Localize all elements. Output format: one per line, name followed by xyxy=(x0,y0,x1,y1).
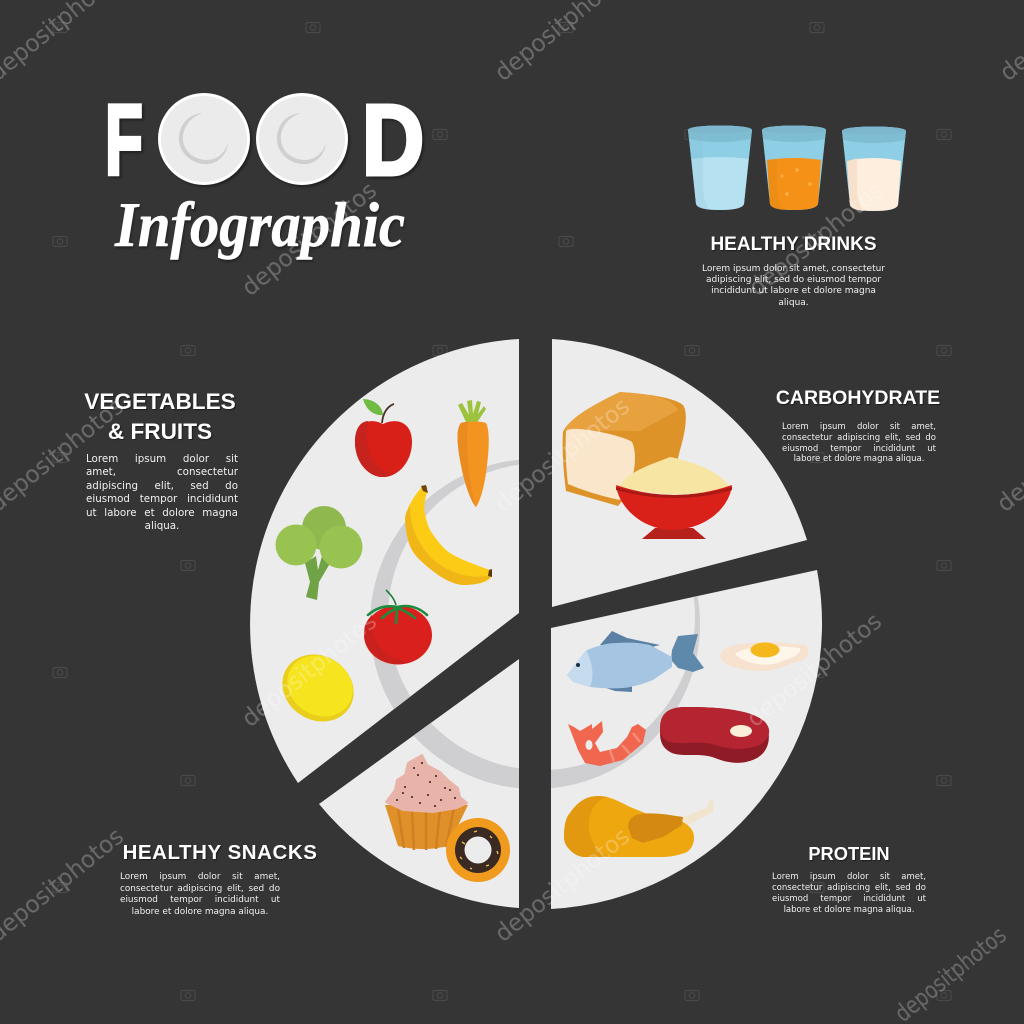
heading: healthy drinks: HEALTHY DRINKS xyxy=(710,234,877,255)
segment: protein xyxy=(551,570,822,909)
watermark text: depositphotos xyxy=(741,607,887,733)
icon: glass of water xyxy=(688,126,752,210)
text: healthy drinks body: incididunt ut labore et dolore magna xyxy=(711,286,876,296)
icon: tomato xyxy=(364,590,432,664)
icon: roast chicken xyxy=(564,796,713,857)
icon: steak xyxy=(660,707,769,763)
heading: healthy snacks: HEALTHY SNACKS xyxy=(123,841,317,864)
text: vegetables and fruits body: amet, consectetur xyxy=(86,466,238,478)
text: healthy snacks body xyxy=(120,872,280,916)
text: vegetables and fruits body: aliqua. xyxy=(145,520,179,532)
icon: glass of milk xyxy=(842,126,906,211)
segment: healthy snacks xyxy=(319,659,519,908)
subtitle script: Infographic xyxy=(114,189,405,260)
watermark text: depositphotos xyxy=(489,392,635,518)
segment: vegetables and fruits xyxy=(250,339,519,783)
heading: vegetables and fruits: & FRUITS xyxy=(108,418,212,444)
heading: vegetables and fruits xyxy=(84,389,236,444)
title letter F: F xyxy=(105,84,143,196)
panel: healthy drinks glasses xyxy=(688,126,906,211)
heading: protein: PROTEIN xyxy=(808,843,890,864)
text: healthy drinks body xyxy=(702,264,885,308)
icon: glass of orange juice xyxy=(762,126,826,210)
text: healthy snacks body: eiusmod tempor incididunt ut xyxy=(120,895,280,905)
text: healthy drinks body: aliqua. xyxy=(778,298,809,308)
text: carbohydrate body: eiusmod tempor incididunt ut xyxy=(782,444,936,454)
icon: lemon xyxy=(270,641,366,735)
text: carbohydrate body: consectetur adipiscing elit, sed do xyxy=(782,433,936,443)
text: vegetables and fruits body: ut labore et dolore magna xyxy=(86,507,238,519)
heading: carbohydrate: CARBOHYDRATE xyxy=(776,387,940,409)
icon: plate as letter O xyxy=(158,93,250,185)
text: vegetables and fruits body: Lorem ipsum dolor sit xyxy=(86,453,238,465)
text: protein body: labore et dolore magna aliqua. xyxy=(784,905,914,915)
text: protein body: Lorem ipsum dolor sit amet, xyxy=(772,872,926,882)
watermark text: depositphotos xyxy=(743,176,889,302)
text: carbohydrate body xyxy=(782,422,936,464)
icon: banana xyxy=(405,485,492,585)
text: protein body xyxy=(772,872,926,915)
watermark text: depositphotos xyxy=(489,822,635,948)
text: healthy drinks body: adipiscing elit, sed do eiusmod tempor xyxy=(706,275,881,285)
text: protein body: eiusmod tempor incididunt ut xyxy=(772,894,926,904)
text: healthy snacks body: Lorem ipsum dolor sit amet, xyxy=(120,872,280,882)
icon: bowl of rice xyxy=(616,457,732,539)
heading: vegetables and fruits: VEGETABLES xyxy=(84,389,236,414)
icon: cupcake xyxy=(385,755,468,850)
plate inner ring xyxy=(370,459,700,789)
text: vegetables and fruits body: adipiscing elit, sed do xyxy=(86,480,238,492)
text: vegetables and fruits body xyxy=(86,453,238,532)
title letter D: D xyxy=(362,84,424,196)
text: carbohydrate body: Lorem ipsum dolor sit amet, xyxy=(782,422,936,432)
text: vegetables and fruits body: eiusmod tempor incididunt xyxy=(86,493,238,505)
icon: bread loaf xyxy=(563,392,686,506)
icon: broccoli xyxy=(276,506,362,600)
icon: apple xyxy=(355,399,412,477)
watermark text: depositphotos xyxy=(236,176,382,302)
icon: carrot xyxy=(458,400,489,507)
icon: donut xyxy=(446,818,510,882)
text: carbohydrate body: labore et dolore magna aliqua. xyxy=(794,454,924,464)
text: healthy drinks body: Lorem ipsum dolor sit amet, consectetur xyxy=(702,264,885,274)
panel: plate pie chart xyxy=(250,339,822,909)
title xyxy=(105,84,424,196)
segment: carbohydrate xyxy=(552,339,807,607)
text: healthy snacks body: consectetur adipiscing elit, sed do xyxy=(120,884,280,894)
watermark text: depositphotos xyxy=(236,607,382,733)
icon: fish xyxy=(567,631,704,692)
icon: plate as letter O xyxy=(256,93,348,185)
text: protein body: consectetur adipiscing elit, sed do xyxy=(772,883,926,893)
icon: shrimp xyxy=(568,721,646,766)
text: healthy snacks body: labore et dolore magna aliqua. xyxy=(132,906,268,916)
icon: fried egg xyxy=(720,642,809,671)
